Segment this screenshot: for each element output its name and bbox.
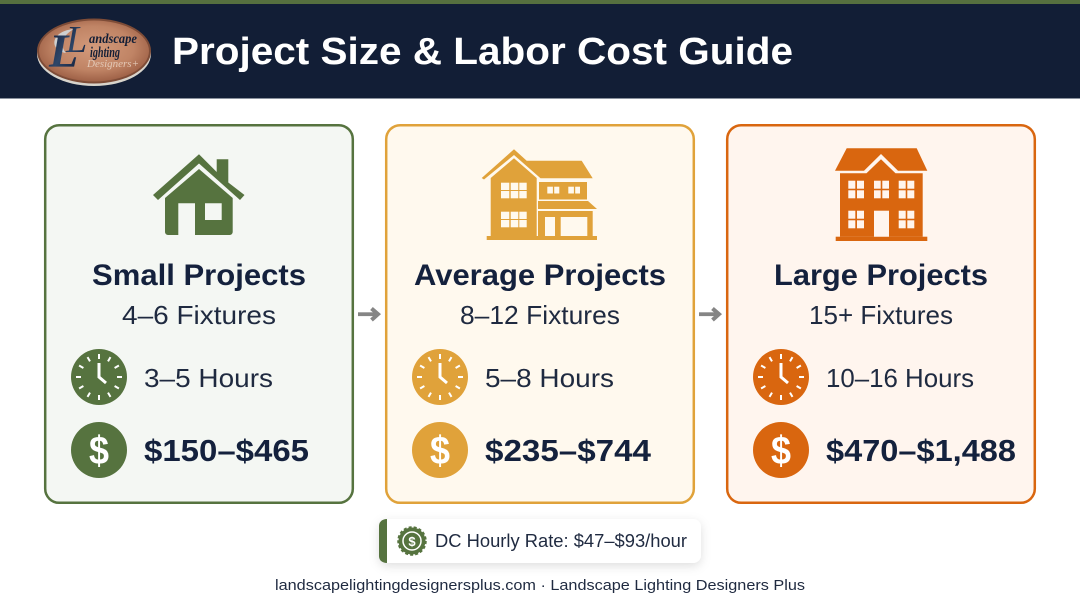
logo: Landscape Lighting Designers Plus: andscape [89,32,137,47]
hours: average: 5–8 Hours [485,363,614,393]
panel: small projects [45,125,353,503]
icon: dollar average [412,422,468,478]
fixtures: average: 8–12 Fixtures [460,300,620,330]
arrow: small to average [358,308,378,320]
header band [0,0,1080,99]
icon: large house [835,148,927,241]
logo: Landscape Lighting Designers Plus: ighting [90,45,120,61]
heading: large projects: Large Projects [774,259,988,292]
price: small: $150–$465 [144,433,309,468]
icon: average house [482,149,597,240]
icon: small house [153,154,244,235]
heading: average projects: Average Projects [414,259,666,292]
icon: clock small [71,349,127,405]
icon: clock average [412,349,468,405]
callout: hourly rate [379,519,701,563]
icon: rate badge [398,528,426,554]
fixtures: small: 4–6 Fixtures [122,300,276,330]
footer: landscapelightingdesignersplus.com · Landscape Lighting Designers Plus [275,577,805,594]
icon: dollar small: $ [89,429,109,473]
panel: average projects [386,125,694,503]
icon: dollar small [71,422,127,478]
logo: Landscape Lighting Designers Plus: L [48,25,78,78]
logo: Landscape Lighting Designers Plus: L [65,19,87,61]
icon: rate badge: $ [408,534,416,549]
icon: clock large [753,349,809,405]
logo: Landscape Lighting Designers Plus [37,18,151,86]
price: average: $235–$744 [485,433,652,468]
rate text: DC Hourly Rate: $47–$93/hour [435,531,687,551]
title: Project Size & Labor Cost Guide [172,31,793,73]
icon: dollar average: $ [430,429,450,473]
logo: Landscape Lighting Designers Plus: Designers+ [86,58,139,70]
icon: dollar large: $ [771,429,791,473]
icon: dollar large [753,422,809,478]
hours: small: 3–5 Hours [144,363,273,393]
arrow: average to large [699,308,719,320]
heading: small projects: Small Projects [92,259,306,292]
fixtures: large: 15+ Fixtures [809,300,953,330]
hours: large: 10–16 Hours [826,363,974,393]
price: large: $470–$1,488 [826,433,1016,468]
panel: large projects [727,125,1035,503]
